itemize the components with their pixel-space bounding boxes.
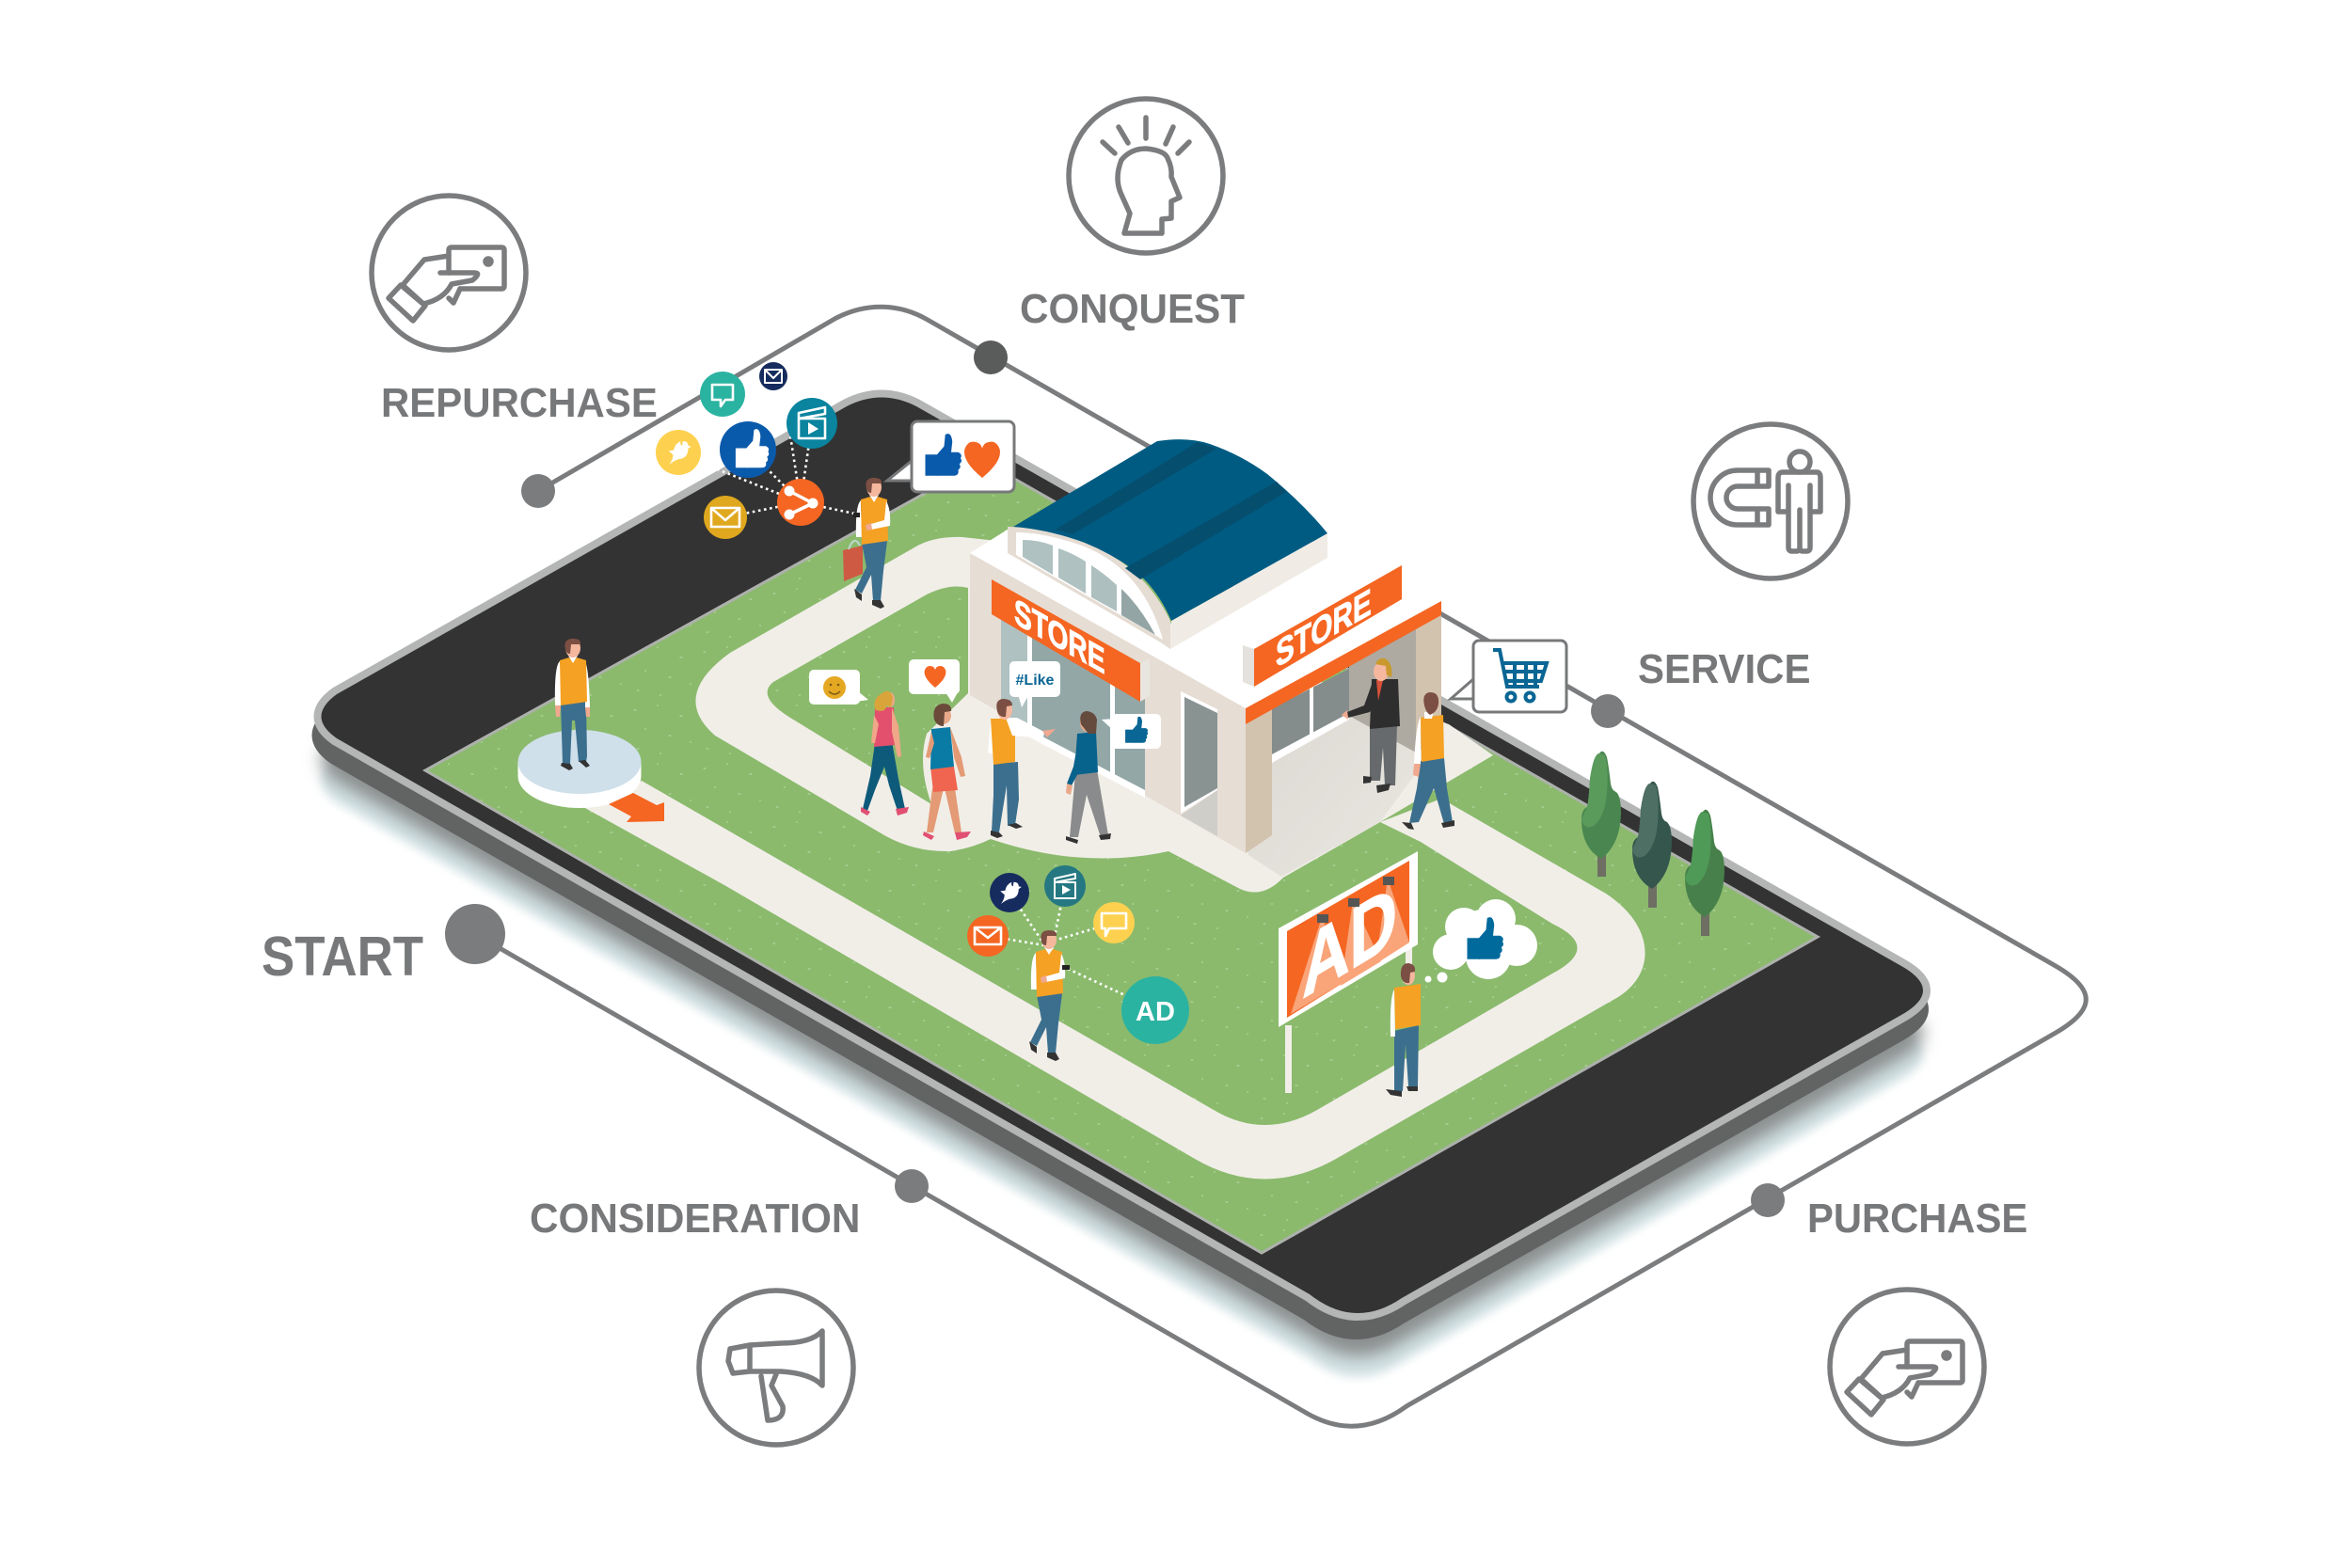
person: man pointing [988, 699, 1056, 838]
bubble: like and heart [887, 421, 1014, 492]
social icon: AD teal: AD [1136, 997, 1175, 1027]
green lawn [425, 461, 1818, 1253]
social icon: chat teal [700, 372, 745, 417]
shop window [1001, 619, 1145, 798]
arch facade [1008, 527, 1170, 649]
person: woman in teal top and coral skirt [923, 704, 971, 840]
icon: cart [1493, 650, 1547, 702]
bubble: #Like: #Like [1016, 673, 1055, 689]
person: man with phone [1029, 930, 1070, 1061]
label: CONSIDERATION: CONSIDERATION [530, 1196, 860, 1242]
white roof deck [970, 528, 1441, 708]
arrow: start direction [609, 793, 664, 822]
person: woman in pink top [861, 691, 909, 816]
label: REPURCHASE: REPURCHASE [381, 380, 658, 426]
label: PURCHASE: PURCHASE [1807, 1196, 2027, 1242]
label: SERVICE: SERVICE [1638, 646, 1810, 692]
label: START: START [262, 925, 423, 988]
roof stripes [1056, 442, 1286, 579]
dotted links: lower social cluster [988, 886, 1129, 997]
bubble: smile [809, 670, 868, 705]
social icon: mail gold [704, 496, 747, 539]
arch window [1016, 532, 1163, 640]
lawn island [768, 587, 968, 804]
dotted links: top social cluster [699, 423, 864, 517]
social icon: bird yellow [656, 430, 701, 475]
right orange fascia [1246, 601, 1441, 724]
tree 3 [1685, 810, 1724, 936]
billboard [1279, 851, 1418, 1093]
STORE sign right [1254, 565, 1402, 687]
store floor [1246, 649, 1441, 877]
icon: consideration megaphone [699, 1291, 853, 1445]
journey path line [475, 307, 2086, 1426]
corner pillar [1246, 709, 1272, 853]
social icon: AD teal [1121, 976, 1189, 1044]
trees [1581, 752, 1724, 936]
person: shopper with bag [843, 478, 890, 609]
node dot: conquest [974, 341, 1008, 374]
social icon: film teal [787, 398, 837, 449]
node dot: consideration [895, 1169, 929, 1203]
social icon: mail orange [967, 915, 1009, 957]
node dot: start [445, 904, 505, 964]
label: CONQUEST: CONQUEST [1020, 286, 1245, 332]
social icon: mail navy [759, 362, 787, 390]
person: man looking at billboard [1386, 963, 1421, 1097]
front-left wall [970, 553, 1246, 853]
blue curved roof [1013, 439, 1327, 621]
STORE sign right: STORE [1276, 580, 1372, 676]
bubble: shopping cart [1451, 641, 1566, 712]
thought cloud with thumb [1424, 899, 1537, 982]
bubble: thumb [1102, 714, 1161, 749]
sign stub left [1140, 658, 1150, 702]
icon: conquest idea head [1069, 99, 1223, 253]
STORE sign left: STORE [1014, 590, 1104, 682]
node dot: purchase [1751, 1183, 1785, 1217]
tree 2 [1632, 782, 1672, 908]
sign stub right [1243, 645, 1254, 687]
node dot: repurchase [521, 474, 555, 508]
social icon: bird navy [990, 873, 1029, 912]
STORE sign left [992, 579, 1140, 702]
store building [970, 439, 1441, 877]
start platform disc [517, 730, 642, 808]
social icon: share orange [777, 479, 824, 526]
icon: service magnet and person [1693, 424, 1848, 578]
person: salesman in suit [1342, 658, 1400, 793]
door [1181, 691, 1217, 836]
right tan pillar [1416, 615, 1441, 752]
roof side wall [1170, 533, 1327, 649]
billboard: AD [1302, 865, 1397, 1018]
road: main path [583, 781, 1645, 1180]
node dot: service [1591, 694, 1625, 728]
person: man near entrance [1402, 692, 1454, 830]
tablet device [320, 397, 1923, 1377]
interior wall [1349, 628, 1416, 752]
road: store plaza [695, 537, 1493, 893]
bubble: #Like [1009, 661, 1060, 707]
bubble: heart [909, 659, 960, 703]
icon: purchase card in hand [1830, 1290, 1984, 1444]
social icon: film teal lower [1044, 865, 1086, 907]
person: start man [555, 639, 590, 770]
social icon: chat yellow [1093, 902, 1135, 943]
social icon: thumb blue [720, 421, 776, 478]
tree 1 [1581, 752, 1621, 877]
right window [1272, 669, 1349, 763]
icon: repurchase card in hand [372, 196, 526, 350]
person: man in navy jacket [1066, 711, 1111, 844]
